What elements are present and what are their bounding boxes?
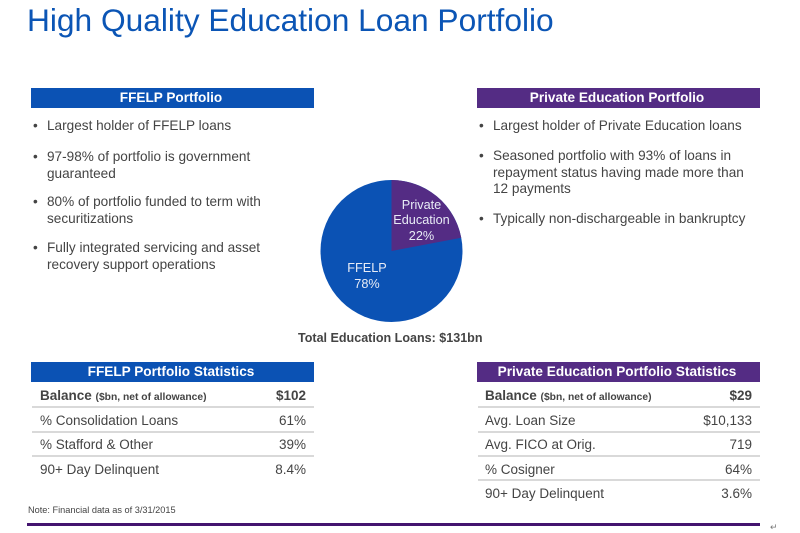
row: consolidation: % Consolidation Loans <box>40 413 178 428</box>
title: High Quality Education Loan Portfolio <box>27 2 554 38</box>
row: delinquent: 90+ Day Delinquent <box>485 486 604 501</box>
bullet: seasoned portfolio: repayment status having made more than <box>493 164 744 180</box>
panel: private education portfolio <box>477 88 760 226</box>
table heading <box>31 362 314 382</box>
row: FICO <box>478 437 760 457</box>
table heading <box>477 362 760 382</box>
bullet: non-dischargeable: Typically non-dischargeable in bankruptcy <box>493 211 745 226</box>
row: stafford <box>32 437 314 457</box>
bullet: seasoned portfolio <box>477 148 744 198</box>
table: private education statistics <box>477 362 760 501</box>
pie label: FFELP: 78% <box>354 277 380 291</box>
bullet: integrated servicing: Fully integrated servicing and asset <box>47 240 260 255</box>
bullet: government guaranteed: 97-98% of portfolio is government <box>47 149 250 164</box>
pie label: private education: 22% <box>409 229 434 243</box>
bullet: government guaranteed <box>31 149 250 182</box>
pie total caption: Total Education Loans: $131bn <box>298 331 483 345</box>
row: delinquent: 3.6% <box>721 486 752 501</box>
row: delinquent: 8.4% <box>275 462 306 477</box>
bullet: seasoned portfolio: 12 payments <box>493 181 571 196</box>
footnote: Note: Financial data as of 3/31/2015 <box>28 505 176 515</box>
heading: private education portfolio <box>477 88 760 108</box>
row: balance: $29 <box>729 388 752 403</box>
heading: FFELP portfolio: FFELP Portfolio <box>120 90 222 105</box>
row: loan size: Avg. Loan Size <box>485 413 576 428</box>
row: delinquent <box>485 486 752 501</box>
bullet: integrated servicing <box>31 240 260 273</box>
row: balance: $102 <box>276 388 306 403</box>
bullet: largest holder: Largest holder of FFELP loans <box>47 118 231 133</box>
pie label: private education: Education <box>393 213 450 227</box>
row: balance: Balance ($bn, net of allowance) <box>485 388 652 403</box>
row: cosigner: 64% <box>725 462 752 477</box>
pie label: private education <box>393 198 450 243</box>
row: delinquent: 90+ Day Delinquent <box>40 462 159 477</box>
bullet: funded to term: securitizations <box>47 210 133 226</box>
row: stafford: 39% <box>279 437 306 452</box>
table heading: Private Education Portfolio Statistics <box>498 364 736 379</box>
row: balance <box>32 388 314 408</box>
pie label: FFELP <box>347 261 387 291</box>
table heading: FFELP Portfolio Statistics <box>88 364 254 379</box>
bullet: funded to term: 80% of portfolio funded to term with <box>47 194 261 209</box>
row: cosigner: % Cosigner <box>485 462 555 477</box>
heading: FFELP portfolio <box>31 88 314 108</box>
pie chart <box>320 180 462 322</box>
row: delinquent <box>40 462 306 477</box>
bullet: largest holder: Largest holder of Private Education loans <box>493 118 742 133</box>
row: stafford: % Stafford & Other <box>40 437 153 452</box>
row: consolidation <box>32 413 314 433</box>
pie label: FFELP: FFELP <box>347 261 387 275</box>
row: cosigner <box>478 462 760 481</box>
row: FICO: Avg. FICO at Orig. <box>485 437 596 452</box>
bullet: government guaranteed: guaranteed <box>47 166 116 180</box>
panel: FFELP portfolio <box>31 88 314 272</box>
row: loan size <box>478 413 760 433</box>
table: FFELP statistics <box>31 362 314 477</box>
heading: private education portfolio: Private Education Portfolio <box>530 90 704 105</box>
row: consolidation: 61% <box>279 413 306 428</box>
row: balance <box>478 388 760 408</box>
bullet: integrated servicing: recovery support operations <box>47 256 216 272</box>
footer rule <box>27 523 760 526</box>
row: balance: Balance ($bn, net of allowance) <box>40 388 207 403</box>
pie label: private education: Private <box>402 198 441 212</box>
row: FICO: 719 <box>729 437 752 452</box>
return mark: ↵ <box>770 522 778 532</box>
bullet: seasoned portfolio: Seasoned portfolio with 93% of loans in <box>493 148 731 163</box>
bullet: funded to term <box>31 194 261 227</box>
row: loan size: $10,133 <box>703 413 752 428</box>
